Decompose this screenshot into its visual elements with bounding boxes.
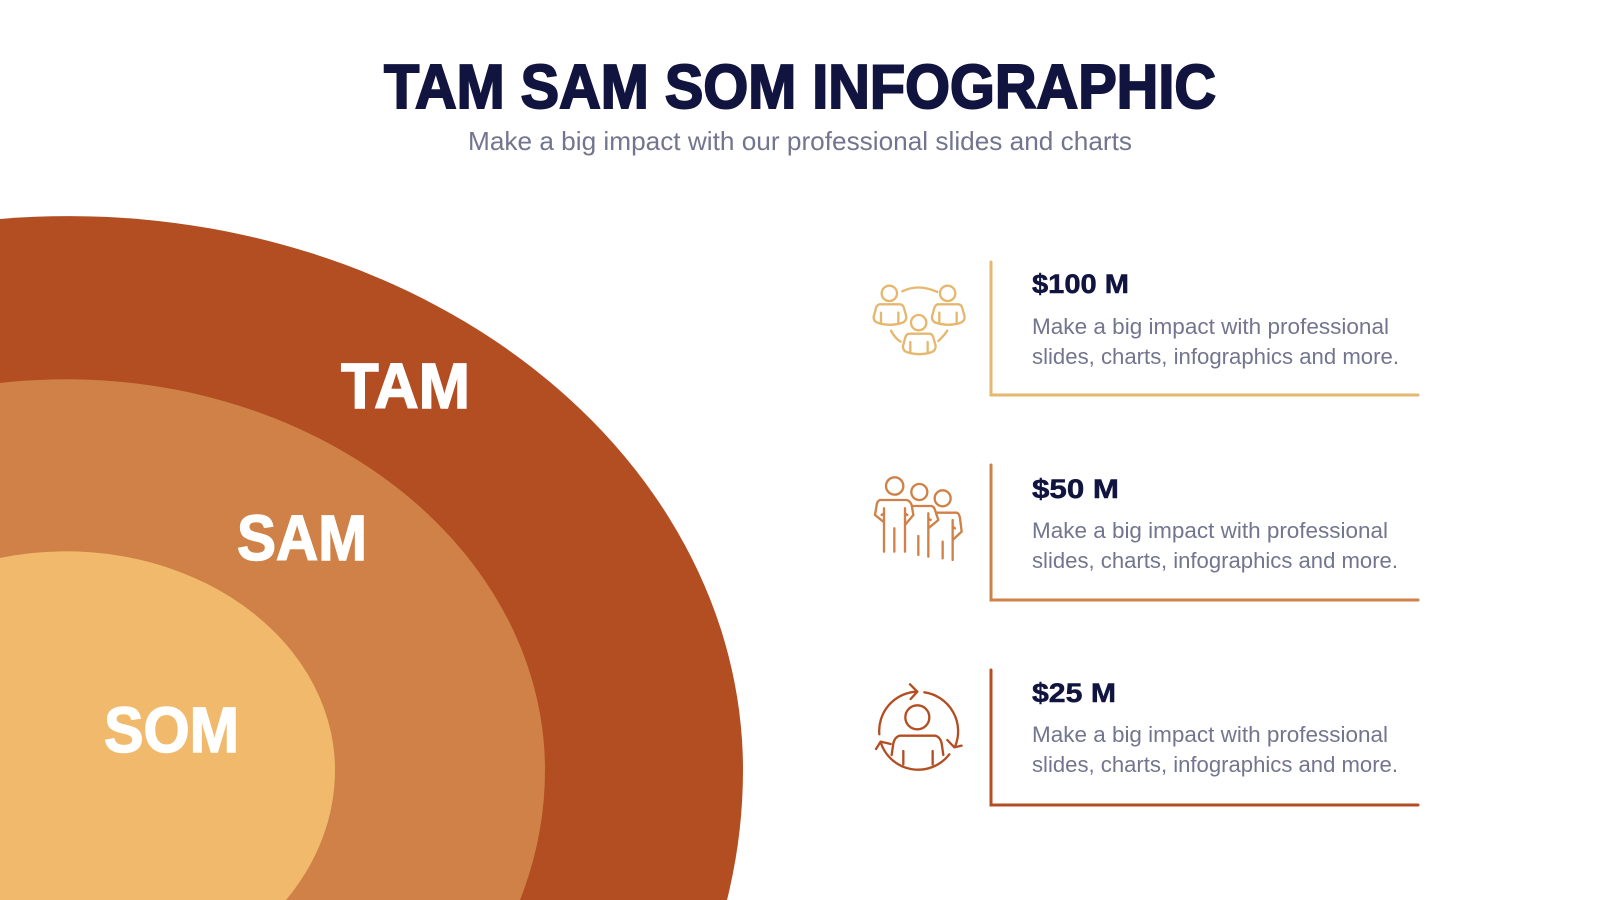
- SAM label: SAM: [237, 502, 367, 574]
- bracket line: [991, 465, 1418, 600]
- description: slides, charts, infographics and more.: [1032, 344, 1399, 369]
- description: Make a big impact with professional: [1032, 722, 1388, 747]
- icon: group of people: [875, 477, 962, 560]
- value: $100 M: [1032, 269, 1129, 299]
- bracket line: [991, 262, 1418, 395]
- TAM label: TAM: [341, 350, 470, 422]
- value: $50 M: [1032, 474, 1119, 504]
- TAM ellipse: [0, 216, 743, 900]
- SAM ellipse: [0, 379, 545, 900]
- SOM ellipse: [0, 551, 335, 900]
- description: slides, charts, infographics and more.: [1032, 548, 1398, 573]
- panel: $25 M: [876, 670, 1418, 805]
- bracket line: [991, 670, 1418, 805]
- panel: $50 M: [875, 465, 1418, 600]
- description: Make a big impact with professional: [1032, 314, 1389, 339]
- icon: person in cycle: [876, 684, 962, 770]
- SOM label: SOM: [104, 694, 239, 766]
- panel: $100 M: [874, 262, 1418, 395]
- description: slides, charts, infographics and more.: [1032, 752, 1398, 777]
- concentric ellipse chart: [0, 216, 743, 900]
- icon: networked people: [874, 286, 965, 354]
- description: Make a big impact with professional: [1032, 518, 1388, 543]
- value: $25 M: [1032, 678, 1116, 708]
- title: TAM SAM SOM INFOGRAPHIC: [384, 53, 1216, 122]
- subtitle: Make a big impact with our professional slides and charts: [468, 126, 1132, 156]
